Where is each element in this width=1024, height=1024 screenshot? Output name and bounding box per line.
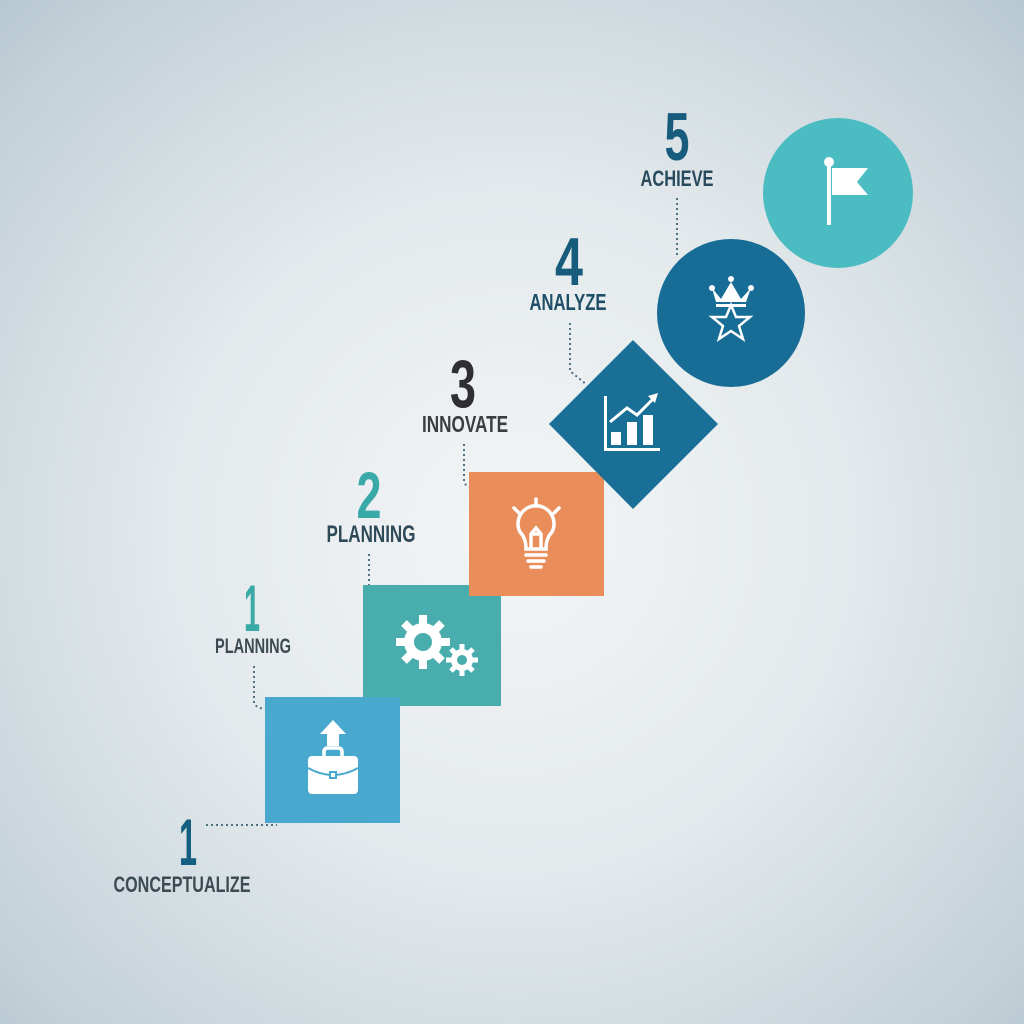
label: 5 achieve: ACHIEVE [640, 166, 714, 191]
label: 1 planning: 1 [244, 571, 260, 645]
label: 5 achieve: 5 [664, 99, 690, 175]
label: 5 achieve [640, 99, 714, 191]
label: 1 planning [215, 571, 291, 658]
label: 2 planning [326, 458, 416, 548]
label: 3 innovate [422, 346, 508, 437]
step 2 square: gears [363, 585, 501, 706]
step 5 circle: flag [763, 118, 913, 268]
label: 1 planning: PLANNING [215, 635, 291, 658]
step 1 square: briefcase [265, 697, 400, 823]
label: 4 analyze: ANALYZE [530, 289, 606, 315]
connectors [206, 198, 677, 825]
label: 1 conceptualize: 1 [179, 805, 197, 879]
step 3 square: lightbulb [469, 472, 604, 596]
label: 4 analyze: 4 [555, 224, 583, 300]
label: 1 conceptualize [114, 805, 250, 897]
label: 2 planning: 2 [356, 458, 382, 532]
label: 1 conceptualize: CONCEPTUALIZE [114, 872, 250, 897]
step 4 diamond: chart [549, 340, 718, 509]
step 4 circle: crown star [657, 239, 805, 387]
label: 4 analyze [530, 224, 606, 315]
label: 2 planning: PLANNING [326, 521, 416, 548]
label: 3 innovate: INNOVATE [422, 411, 508, 437]
label: 3 innovate: 3 [450, 346, 476, 422]
